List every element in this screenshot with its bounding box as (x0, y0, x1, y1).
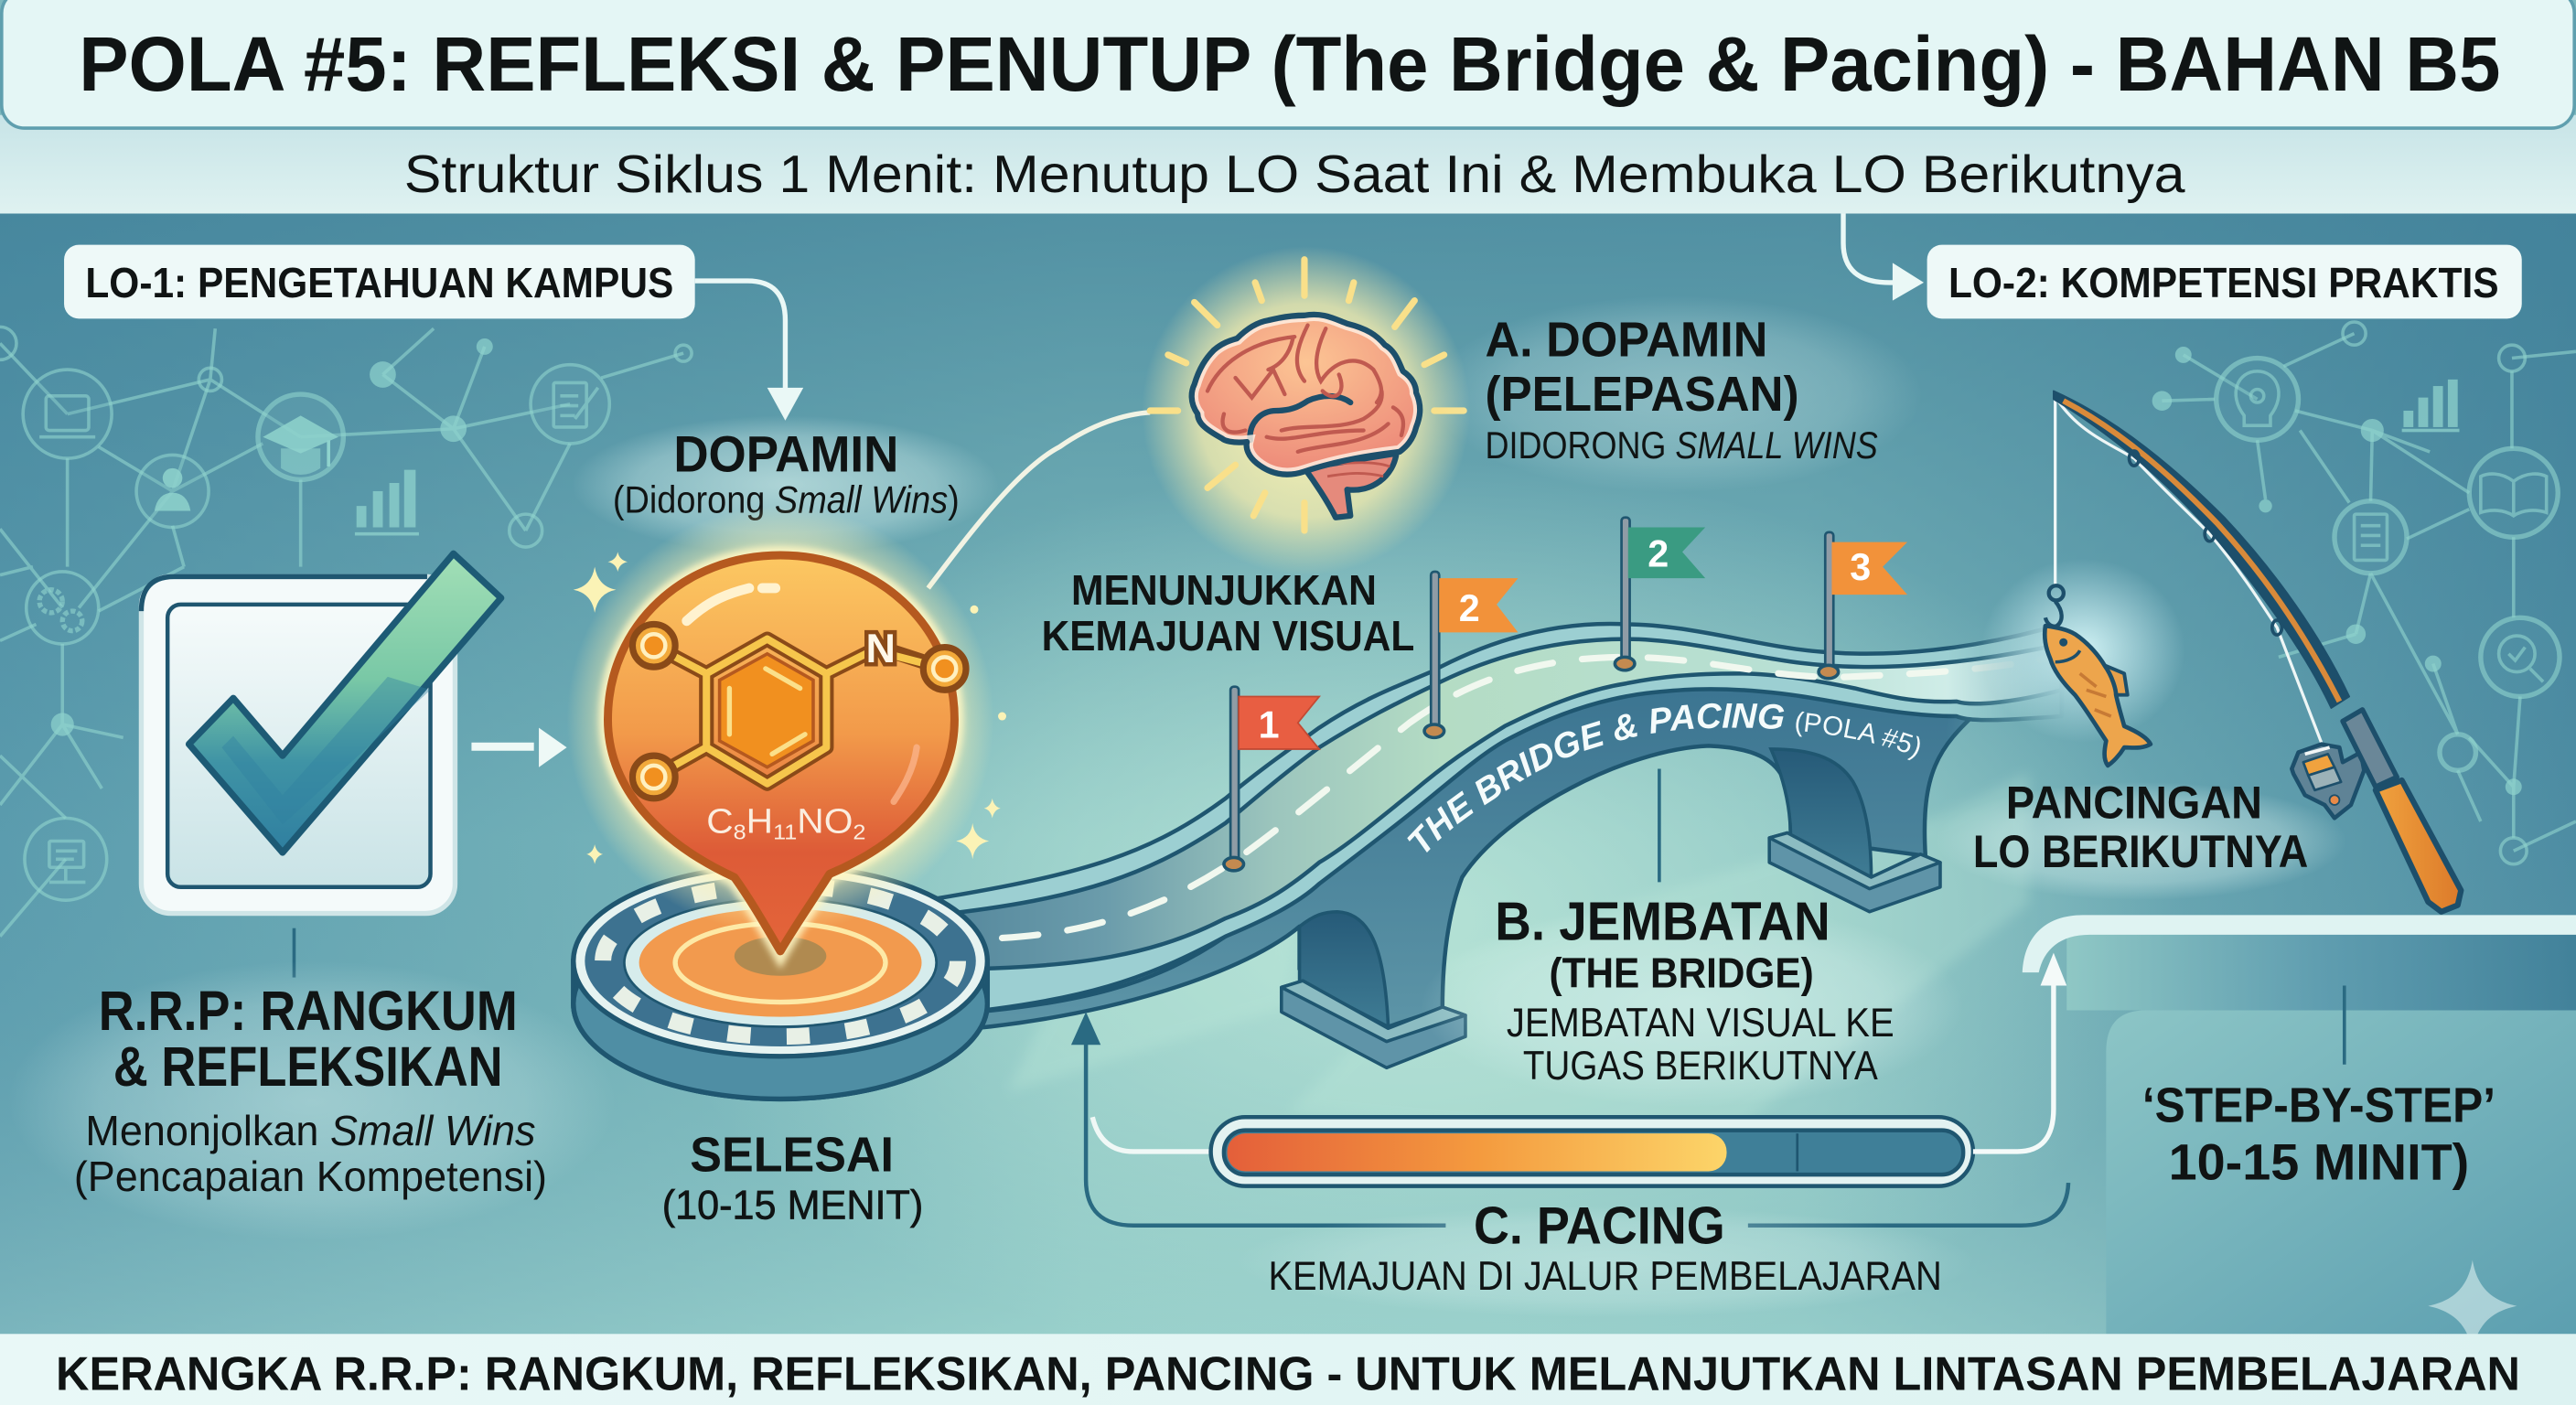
road and bridge (937, 622, 2053, 1070)
formula: 2 (853, 820, 865, 844)
flag 3 (1819, 532, 1907, 679)
formula: 11 (773, 820, 797, 844)
right arch hollow (1771, 749, 1872, 877)
fishing line and guide rings (2056, 399, 2322, 743)
network: left knowledge graph (0, 327, 692, 937)
molecule pin: dopamine (567, 506, 994, 951)
rod handle (2376, 780, 2461, 912)
text block: C. Pacing: KEMAJUAN DI JALUR PEMBELAJARAN (1268, 1252, 1942, 1299)
sparkles around orb (574, 552, 1006, 864)
flag 3: 3 (1850, 546, 1871, 588)
brain rays (1150, 260, 1464, 531)
bridge label text (1422, 728, 1971, 857)
left arch hollow (1300, 912, 1389, 1026)
connector: orb to brain (928, 413, 1150, 588)
label: LO-2 (1927, 245, 2522, 318)
label: dopamine: DOPAMIN (673, 425, 898, 482)
text block: next LO hook (1936, 776, 2346, 900)
text block: step-by-step: 10-15 MINIT) (2169, 1133, 2469, 1190)
connector: pacing right (1748, 1183, 2068, 1226)
text block: next LO hook: PANCINGAN (2006, 776, 2262, 828)
label: LO-1: LO-1: PENGETAHUAN KAMPUS (85, 259, 673, 306)
flag 2 orange: 2 (1459, 587, 1480, 629)
flag 2 green: 2 (1648, 533, 1669, 575)
text block: visual progress (1042, 566, 1414, 660)
panel: checkbox with checkmark (141, 553, 501, 914)
title: POLA #5: REFLEKSI & PENUTUP (The Bridge & Pacing) - BAHAN B5 (79, 21, 2500, 107)
formula: H (746, 802, 773, 841)
text block: step-by-step (2142, 1078, 2496, 1190)
text block: B. Jembatan: JEMBATAN VISUAL KE (1507, 999, 1894, 1046)
flag 2 orange (1424, 572, 1518, 737)
icon: graduation cap (263, 415, 338, 475)
title box (2, 0, 2574, 128)
icon: check mark (189, 553, 501, 853)
footer: KERANGKA R.R.P: RANGKUM, REFLEKSIKAN, PANCING - UNTUK MELANJUTKAN LINTASAN PEMBELAJARAN (56, 1347, 2520, 1400)
icon: document (553, 382, 598, 427)
icon: fish on hook (2045, 585, 2151, 766)
formula: 8 (734, 820, 746, 844)
left footing (1282, 981, 1465, 1067)
text block: A. Dopamin: A. DOPAMIN (1486, 313, 1767, 368)
icon: book (2481, 474, 2547, 516)
label: selesai: (10-15 MENIT) (662, 1182, 923, 1228)
text block: R.R.P: & REFLEKSIKAN (113, 1035, 503, 1098)
stem and cerebellum (1304, 454, 1397, 518)
text block: C. Pacing (1236, 1197, 1975, 1317)
text block: step-by-step: ‘STEP-BY-STEP’ (2142, 1078, 2496, 1133)
leader line: bridge (1658, 768, 1660, 882)
text block: R.R.P: (Pencapaian Kompetensi) (74, 1153, 547, 1200)
label: LO-1 (64, 245, 695, 318)
formula: NO (797, 802, 853, 841)
icon: brain (1142, 246, 1470, 575)
text block: A. Dopamin: DIDORONG SMALL WINS (1486, 424, 1878, 467)
label: selesai: SELESAI (690, 1127, 894, 1182)
icon: magnifier check (2499, 636, 2543, 681)
text block: visual progress: KEMAJUAN VISUAL (1042, 612, 1414, 660)
road centre dashes (1003, 657, 2054, 938)
label: selesai (662, 1127, 923, 1228)
icon: fishing rod (2054, 391, 2461, 912)
progress bar (1211, 1117, 1973, 1186)
text block: A. Dopamin (1429, 295, 1922, 493)
header band (0, 115, 2576, 213)
molecule: N (865, 625, 896, 671)
leader line: checkbox (293, 928, 295, 978)
arrow: pacing to platform (1071, 1012, 1445, 1226)
molecule (632, 624, 966, 799)
label: LO-2: LO-2: KOMPETENSI PRAKTIS (1948, 259, 2499, 306)
text block: R.R.P: Menonjolkan Small Wins (85, 1107, 535, 1154)
icon: corner sparkle (2428, 1260, 2517, 1352)
road surface (937, 639, 2062, 970)
right footing (1769, 833, 1940, 912)
arrow: subtitle to LO-2 (1843, 213, 1924, 301)
icon: bars (355, 470, 419, 535)
network: right knowledge graph (2152, 322, 2576, 864)
bridge body (982, 692, 1970, 1030)
subtitle: Struktur Siklus 1 Menit: Menutup LO Saat Ini & Membuka LO Berikutnya (404, 145, 2185, 204)
platform (574, 865, 987, 1099)
text block: A. Dopamin: (PELEPASAN) (1486, 367, 1799, 422)
fish glow (1981, 559, 2185, 743)
brain rim (1192, 315, 1420, 475)
icon: checklist document (2355, 514, 2387, 560)
text block: R.R.P (8, 961, 616, 1240)
icon: lightbulb (2236, 371, 2279, 425)
text block: B. Jembatan: B. JEMBATAN (1495, 890, 1830, 951)
text block: B. Jembatan (1421, 890, 1963, 1107)
leader line: step-by-step (2344, 986, 2345, 1065)
cerebrum (1192, 315, 1420, 475)
label: dopamine (572, 415, 999, 553)
icon: right bars (2402, 380, 2459, 432)
flag 2 green (1615, 518, 1705, 670)
arrow: checkbox to orb (471, 728, 567, 767)
brain folds (1250, 396, 1350, 440)
deck lip (937, 624, 2062, 1015)
formula: C (706, 802, 731, 841)
text block: C. Pacing: C. PACING (1474, 1197, 1725, 1256)
flag 1: 1 (1259, 703, 1280, 745)
flag 1 (1224, 687, 1319, 871)
text block: next LO hook: LO BERIKUTNYA (1973, 825, 2308, 877)
label: dopamine: (Didorong Small Wins) (613, 478, 960, 520)
road and bridge: THE BRIDGE & PACING (POLA #5) (1407, 702, 1920, 853)
text block: R.R.P: R.R.P: RANGKUM (99, 980, 518, 1042)
arrow: LO-1 to dopamine (695, 281, 803, 421)
text block: B. Jembatan: (THE BRIDGE) (1550, 949, 1814, 996)
icon: person (155, 468, 190, 511)
icon: monitor (49, 842, 85, 882)
icon: laptop (39, 396, 95, 437)
rod grip (2343, 710, 2397, 787)
text block: B. Jembatan: TUGAS BERIKUTNYA (1523, 1042, 1878, 1089)
panel: step-by-step (2023, 915, 2576, 1334)
arrow: progress bar up to next step (1973, 953, 2066, 1152)
text block: visual progress: MENUNJUKKAN (1071, 566, 1377, 614)
reel (2292, 745, 2364, 818)
icon: gears (39, 590, 82, 631)
